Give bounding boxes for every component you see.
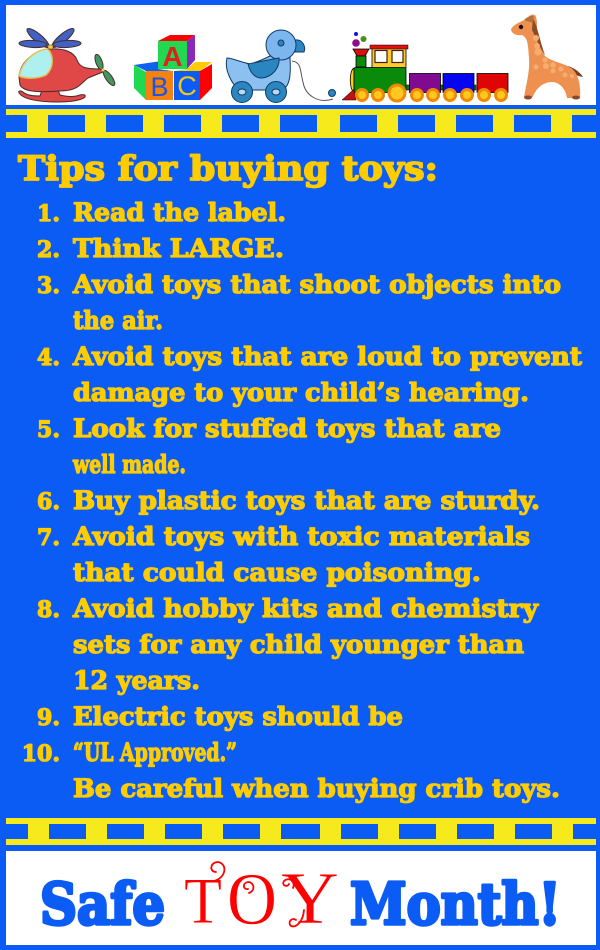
list of tips: “UL Approved.”	[73, 738, 237, 767]
icon: alphabet blocks	[134, 35, 212, 102]
icon: helicopter	[19, 26, 117, 102]
banner word: Month!: Month!	[350, 871, 561, 938]
list numbers: 4.	[37, 345, 60, 371]
banner word: TOY: Y	[281, 858, 339, 940]
list of tips: Avoid toys with toxic materials	[72, 522, 530, 551]
decorative stripe: top	[6, 109, 596, 138]
list of tips: Buy plastic toys that are sturdy.	[73, 486, 540, 515]
panel: safe toy month banner	[6, 851, 596, 945]
list of tips: damage to your child’s hearing.	[73, 378, 529, 407]
list of tips: Avoid toys that are loud to prevent	[72, 342, 582, 371]
banner word: TOY: O	[227, 859, 277, 941]
list of tips: Be careful when buying crib toys.	[73, 774, 560, 803]
list of tips: the air.	[73, 306, 163, 335]
icon: toy train	[342, 32, 508, 101]
list of tips	[72, 198, 582, 803]
panel: toy illustrations	[6, 5, 596, 105]
list numbers: 9.	[37, 705, 60, 731]
list of tips: Think LARGE.	[73, 234, 284, 263]
list numbers	[22, 201, 60, 767]
list of tips: 12 years.	[73, 666, 200, 695]
banner word: TOY	[184, 858, 339, 941]
list numbers: 7.	[37, 525, 60, 551]
list numbers: 5.	[37, 417, 60, 443]
list of tips: well made.	[72, 450, 186, 479]
list numbers: 8.	[37, 597, 60, 623]
list numbers: 6.	[37, 489, 60, 515]
banner word: TOY: T	[184, 865, 222, 938]
list of tips: Avoid hobby kits and chemistry	[72, 594, 540, 623]
decorative stripe: bottom	[6, 818, 596, 845]
icon: giraffe	[511, 15, 583, 100]
icon: pull-along duck	[226, 30, 336, 102]
letter C: C	[177, 71, 197, 101]
heading: tips: Tips for buying toys:	[18, 149, 438, 189]
list numbers: 10.	[22, 741, 60, 767]
list of tips: Electric toys should be	[73, 702, 403, 731]
list numbers: 1.	[37, 201, 60, 227]
list numbers: 3.	[37, 273, 60, 299]
list of tips: that could cause poisoning.	[73, 558, 481, 587]
letter A: A	[162, 41, 183, 72]
list of tips: Look for stuffed toys that are	[73, 414, 501, 443]
list of tips: Avoid toys that shoot objects into	[72, 270, 561, 299]
banner word: Safe: Safe	[40, 871, 165, 938]
list of tips: sets for any child younger than	[73, 630, 524, 659]
list of tips: Read the label.	[73, 198, 286, 227]
list numbers: 2.	[37, 237, 60, 263]
letter B: B	[150, 72, 169, 102]
